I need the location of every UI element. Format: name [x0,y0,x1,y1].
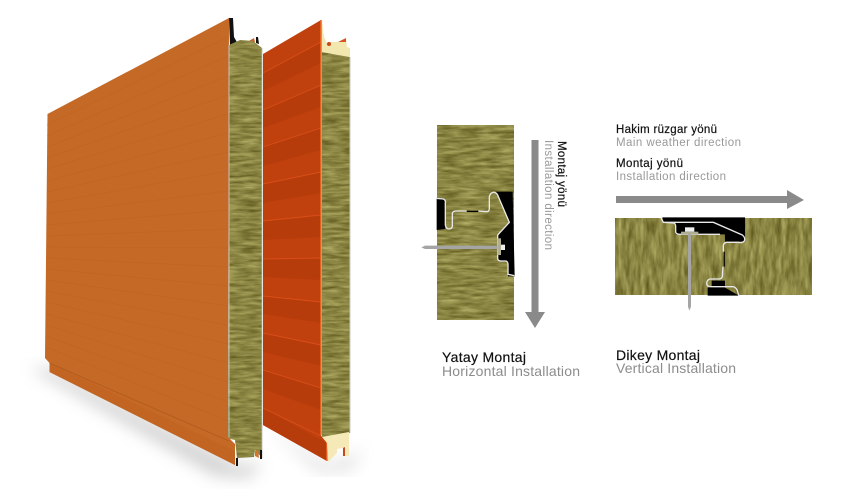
top tongue profile [229,18,259,46]
label: vertical installation: Vertical Installation [616,360,736,376]
mineral wool edge [228,40,262,458]
horizontal installation section [421,125,515,320]
label: wind and installation direction: Montaj yönü [616,158,683,170]
label: installation direction rotated: Montaj yönü [555,141,567,207]
bottom groove profile [236,450,262,466]
orange sandwich panel [45,18,265,466]
joint profile [436,192,515,276]
vertical installation section [615,217,812,311]
orange panel face [45,18,235,465]
cream top profile [322,20,350,57]
label: wind and installation direction: Installation direction [616,171,726,183]
label: vertical installation: Dikey Montaj [616,347,700,363]
joint profile [661,217,745,296]
label: installation direction rotated: Installation direction [542,140,554,250]
mineral wool edge [322,50,352,440]
wool cross-section [437,125,514,320]
red sandwich panel [263,20,352,462]
label: wind and installation direction: Hakim rüzgar yönü [616,124,717,136]
label: horizontal installation: Yatay Montaj [442,349,526,365]
fastening screw [421,238,505,255]
label: installation direction rotated [542,140,567,250]
label: vertical installation [616,347,736,376]
panel shadow [30,368,364,478]
red panel face [263,20,327,461]
wool cross-section [615,218,812,295]
cream bottom profile [322,432,349,462]
label: horizontal installation [442,349,580,379]
fastening screw [681,227,698,311]
label: wind and installation direction: Main weather direction [616,137,741,149]
label: wind and installation direction [616,124,741,183]
arrow: vertical installation direction [525,140,545,328]
label: horizontal installation: Horizontal Installation [442,363,580,379]
arrow: horizontal installation direction [616,190,804,209]
